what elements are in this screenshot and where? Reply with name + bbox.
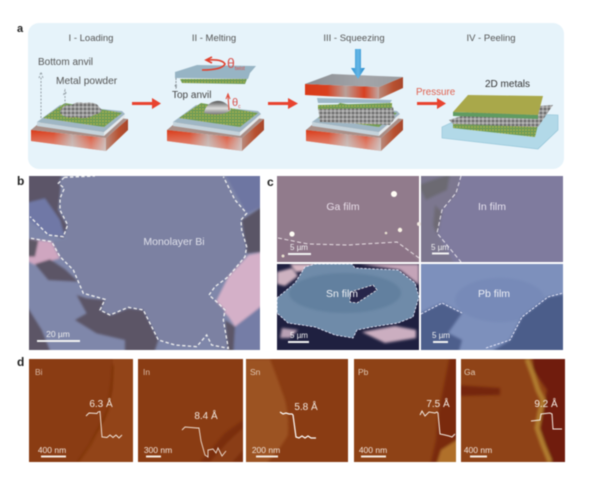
pressure label: Pressure — [416, 87, 456, 98]
heading: II - Melting: II - Melting — [192, 33, 236, 44]
AFM Sn — [240, 359, 348, 468]
upper film front — [453, 112, 538, 119]
glass substrate — [442, 112, 558, 149]
arrow II to III — [268, 98, 298, 109]
In film image: 5 µm — [431, 243, 449, 252]
AFM Pb: Pb — [358, 367, 369, 377]
metal droplet — [204, 101, 231, 114]
micrograph b — [25, 172, 265, 355]
dashed arrow to metal powder label — [64, 90, 66, 105]
AFM Sn: Sn — [250, 367, 261, 377]
AFM Ga: 400 nm — [464, 445, 492, 455]
label d: d — [17, 355, 24, 369]
AFM Bi — [29, 359, 133, 462]
lower stack — [167, 103, 264, 151]
label c: c — [267, 175, 274, 189]
Sn film image — [277, 264, 419, 350]
AFM In: 300 nm — [144, 445, 172, 455]
label a: a — [17, 23, 24, 35]
panel b: monolayer Bi micrograph — [17, 172, 265, 355]
upper slab — [317, 98, 392, 103]
AFM In: In — [143, 367, 150, 377]
bottom anvil stack — [31, 103, 128, 151]
heading: I - Loading: I - Loading — [69, 33, 113, 44]
AFM Ga — [460, 358, 566, 463]
In film image — [420, 175, 564, 263]
scale bar b — [37, 329, 80, 342]
AFM Pb — [354, 355, 460, 466]
lower film — [453, 121, 538, 137]
Pb film image — [420, 263, 564, 351]
contact angle arrow — [226, 94, 230, 110]
twist arrow — [202, 57, 225, 70]
top anvil side red — [305, 84, 379, 99]
squeezed gray metal layer — [318, 107, 395, 125]
heading: IV - Peeling: IV - Peeling — [466, 33, 516, 44]
AFM Bi: 6.3 Å — [89, 397, 113, 410]
lower stack — [306, 103, 403, 151]
theta c label: θ — [232, 97, 238, 109]
label b: b — [17, 174, 24, 188]
metal powder pile — [60, 102, 102, 118]
stage IV: peeling — [442, 79, 558, 149]
AFM Bi: 400 nm — [38, 445, 66, 455]
Pb film image: 5 µm — [432, 331, 450, 340]
panel c: metal film micrographs — [267, 170, 570, 355]
Pb film image: Pb film — [478, 288, 510, 300]
stage I: loading stack — [31, 57, 128, 151]
panel d: AFM images — [17, 355, 570, 468]
label: metal powder: Metal powder — [56, 76, 118, 87]
stage III: squeezing — [305, 49, 403, 151]
In film image: In film — [478, 201, 506, 213]
theta c label: c — [238, 104, 241, 110]
arrow I to II — [132, 98, 161, 109]
label: monolayer Bi: Monolayer Bi — [143, 236, 205, 248]
top anvil right side — [379, 77, 403, 99]
Sn film image: 5 µm — [290, 331, 308, 340]
dashed arrow to bottom anvil label — [39, 72, 43, 118]
Ga film image: 5 µm — [290, 243, 308, 252]
AFM In: 8.4 Å — [194, 409, 218, 422]
panel a background — [28, 23, 564, 169]
AFM In — [138, 359, 243, 462]
heading: III - Squeezing: III - Squeezing — [323, 33, 385, 44]
top anvil slab — [175, 65, 256, 79]
top anvil top face — [305, 74, 403, 87]
upper film — [318, 103, 392, 109]
label: top anvil: Top anvil — [172, 90, 211, 101]
Ga film image: Ga film — [326, 201, 360, 213]
AFM Ga: 9.2 Å — [534, 397, 558, 410]
AFM Ga: Ga — [464, 367, 476, 377]
arrow down to top anvil label — [175, 78, 177, 88]
upper film top — [453, 95, 543, 115]
arrow III to IV — [417, 98, 446, 109]
theta twist label: θ — [227, 55, 235, 71]
metal layer — [449, 105, 553, 127]
blue press arrow — [351, 49, 365, 79]
AFM Sn: 5.8 Å — [294, 400, 318, 413]
AFM Bi: Bi — [35, 367, 43, 377]
Sn film image: Sn film — [326, 288, 358, 300]
top anvil film — [180, 79, 247, 84]
scale bar b: 20 µm — [46, 329, 70, 339]
AFM Sn: 200 nm — [252, 445, 280, 455]
AFM Pb: 400 nm — [359, 445, 387, 455]
theta twist label: twist — [235, 66, 245, 72]
panel a: process schematic — [17, 23, 564, 169]
stage II: melting — [167, 55, 264, 151]
label: bottom anvil: Bottom anvil — [38, 57, 93, 68]
AFM Pb: 7.5 Å — [426, 397, 450, 410]
Ga film image — [277, 176, 421, 262]
label: 2D metals: 2D metals — [485, 79, 530, 90]
